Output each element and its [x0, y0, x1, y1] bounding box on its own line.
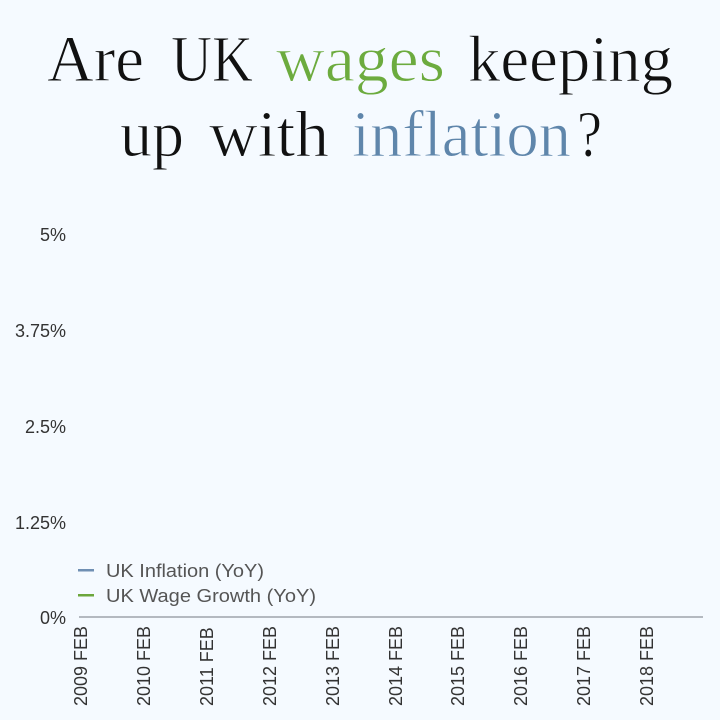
title: keeping: [468, 23, 673, 96]
x axis labels: 2017 FEB: [574, 626, 594, 706]
y axis labels: 2.5%: [25, 417, 66, 437]
x axis labels: 2012 FEB: [260, 626, 280, 706]
title: with: [209, 98, 329, 171]
y axis labels: 3.75%: [15, 321, 66, 341]
x axis labels: 2011 FEB: [197, 627, 217, 706]
x axis labels: 2010 FEB: [134, 626, 154, 706]
x axis labels: 2009 FEB: [71, 626, 91, 706]
legend: UK Inflation (YoY): [106, 561, 264, 581]
title: Are: [47, 23, 144, 96]
y axis labels: [15, 225, 66, 628]
title: [47, 23, 673, 171]
x axis labels: [71, 626, 657, 706]
title: inflation: [352, 98, 571, 171]
y axis labels: 0%: [40, 608, 66, 628]
title: up: [120, 98, 184, 171]
y axis labels: 5%: [40, 225, 66, 245]
x axis labels: 2016 FEB: [511, 626, 531, 706]
legend: [78, 561, 316, 606]
x axis labels: 2013 FEB: [323, 626, 343, 706]
x axis line: [79, 616, 703, 618]
x axis labels: 2018 FEB: [637, 626, 657, 706]
x axis labels: 2015 FEB: [448, 626, 468, 706]
title: UK: [171, 23, 253, 96]
x axis labels: 2014 FEB: [386, 626, 406, 706]
title: ?: [577, 98, 602, 171]
y axis labels: 1.25%: [15, 513, 66, 533]
title: wages: [276, 23, 445, 96]
legend: UK Wage Growth (YoY): [106, 586, 316, 606]
